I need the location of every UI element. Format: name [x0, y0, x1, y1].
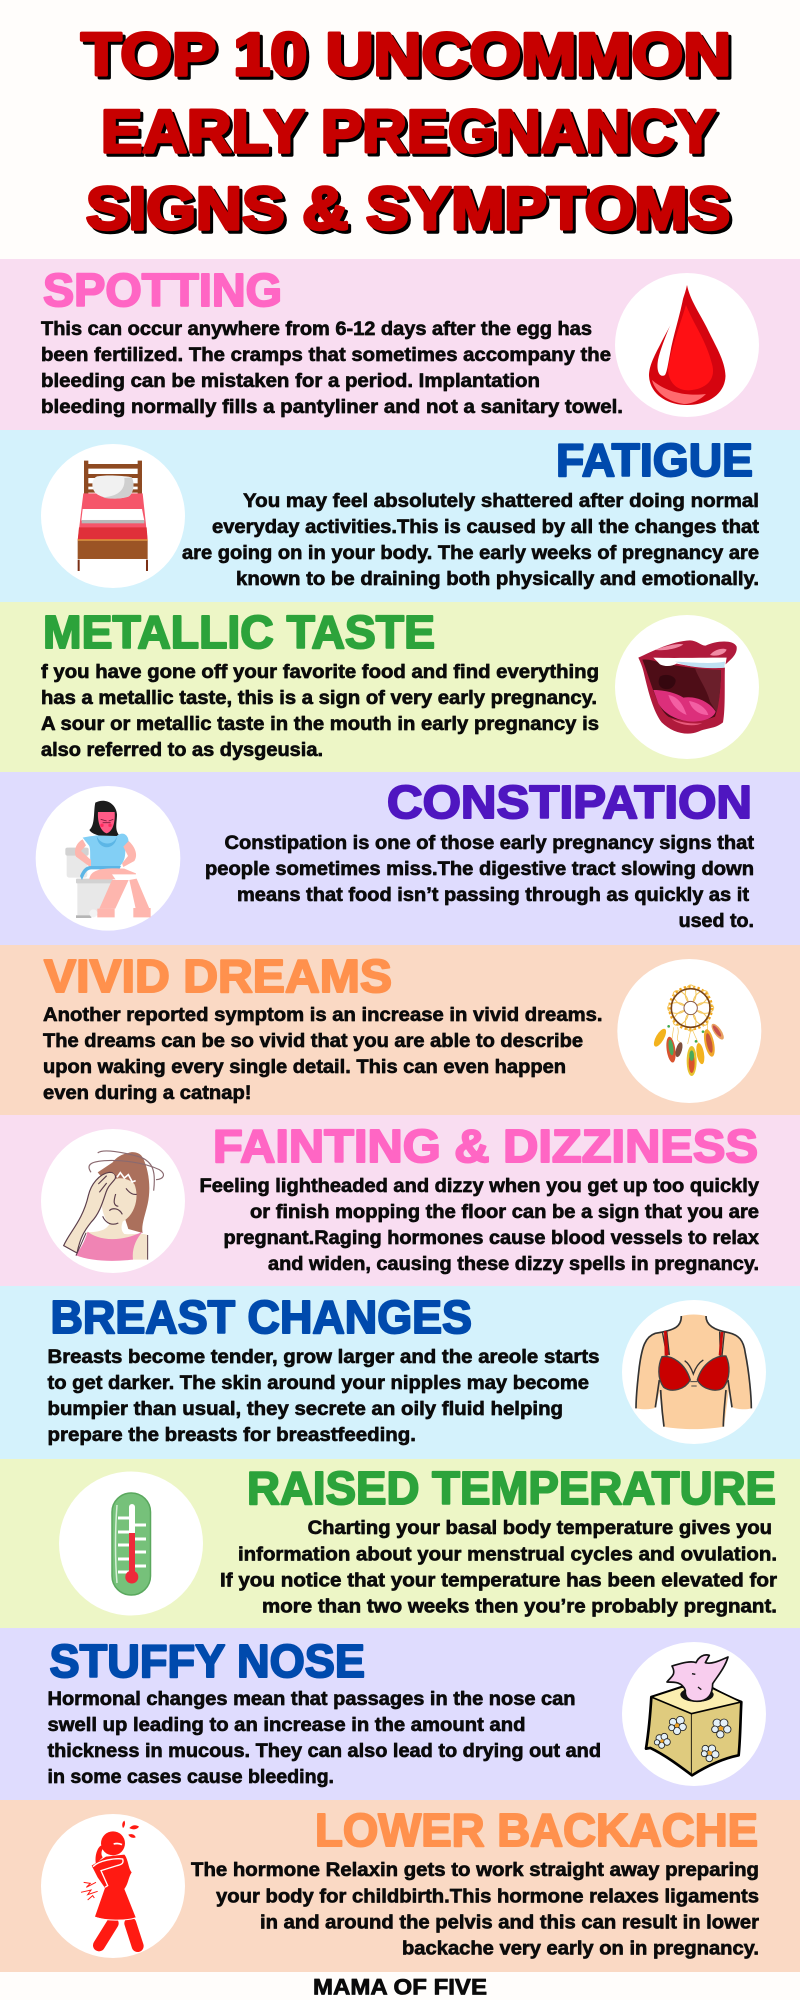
- panel: vivid dreams: [0, 945, 800, 1115]
- text block: breast changes: prepare the breasts for breastfeeding.: [48, 1425, 416, 1446]
- heading: breast changes: BREAST CHANGES: [50, 1291, 472, 1343]
- title: [81, 21, 731, 242]
- heading: fainting and dizziness: FAINTING & DIZZINESS: [213, 1120, 758, 1172]
- icon: open mouth: [615, 615, 759, 759]
- text block: fatigue: everyday activities.This is caused by all the changes that: [212, 517, 760, 538]
- text block: fainting and dizziness: Feeling lightheaded and dizzy when you get up too quickly: [200, 1176, 759, 1197]
- panel: metallic taste: [0, 602, 800, 772]
- text block: vivid dreams: [43, 1005, 602, 1104]
- heading: stuffy nose: STUFFY NOSE: [50, 1635, 365, 1687]
- text block: raised temperature: If you notice that your temperature has been elevated for: [220, 1570, 778, 1592]
- text block: breast changes: to get darker. The skin around your nipples may become: [48, 1373, 589, 1394]
- text block: fainting and dizziness: [200, 1176, 759, 1275]
- text block: constipation: [205, 833, 755, 932]
- text block: metallic taste: also referred to as dysgeusia.: [41, 740, 323, 761]
- icon: tissue box: [622, 1642, 766, 1786]
- text block: lower backache: [191, 1860, 760, 1960]
- text block: vivid dreams: The dreams can be so vivid that you are able to describe: [43, 1031, 583, 1052]
- icon: bed: [41, 444, 185, 588]
- panel: raised temperature: [0, 1459, 800, 1628]
- text block: fatigue: You may feel absolutely shattered after doing normal: [243, 491, 759, 512]
- panel: constipation: [0, 772, 800, 945]
- panel: breast changes: [0, 1286, 800, 1459]
- panel: stuffy nose: [0, 1628, 800, 1800]
- heading: fatigue: FATIGUE: [556, 434, 753, 486]
- text block: fatigue: [182, 491, 760, 590]
- text block: fainting and dizziness: and widen, causing these dizzy spells in pregnancy.: [268, 1254, 759, 1275]
- text block: spotting: This can occur anywhere from 6-12 days after the egg has: [41, 319, 592, 340]
- text block: constipation: used to.: [679, 911, 754, 932]
- text block: raised temperature: [220, 1518, 778, 1618]
- icon: torso with red bra: [622, 1300, 766, 1444]
- text block: vivid dreams: upon waking every single detail. This can even happen: [43, 1057, 566, 1078]
- text block: fatigue: known to be draining both physically and emotionally.: [236, 569, 759, 590]
- text block: spotting: [41, 319, 623, 418]
- text block: raised temperature: more than two weeks then you’re probably pregnant.: [262, 1596, 777, 1618]
- text block: vivid dreams: even during a catnap!: [43, 1083, 252, 1104]
- text block: stuffy nose: in some cases cause bleeding.: [48, 1767, 334, 1788]
- heading: metallic taste: METALLIC TASTE: [43, 606, 435, 658]
- text block: metallic taste: f you have gone off your favorite food and find everything: [41, 662, 599, 683]
- text block: metallic taste: A sour or metallic taste in the mouth in early pregnancy is: [41, 714, 599, 735]
- panel: fatigue: [0, 430, 800, 602]
- icon: woman on toilet: [36, 786, 180, 931]
- footer credit: MAMA OF FIVE: [313, 1974, 487, 2000]
- text block: constipation: Constipation is one of those early pregnancy signs that: [224, 833, 755, 854]
- text block: constipation: people sometimes miss.The digestive tract slowing down: [205, 859, 754, 880]
- heading: vivid dreams: VIVID DREAMS: [44, 950, 392, 1002]
- text block: constipation: means that food isn’t passing through as quickly as it: [237, 885, 750, 906]
- title: SIGNS & SYMPTOMS: [86, 175, 730, 242]
- icon: blood drop: [615, 273, 759, 417]
- icon: dizzy woman: [41, 1129, 185, 1273]
- text block: fainting and dizziness: pregnant.Raging hormones cause blood vessels to relax: [224, 1228, 759, 1249]
- text block: raised temperature: information about your menstrual cycles and ovulation.: [238, 1544, 777, 1566]
- heading: constipation: CONSTIPATION: [387, 776, 752, 828]
- text block: vivid dreams: Another reported symptom is an increase in vivid dreams.: [43, 1005, 602, 1026]
- text block: breast changes: [48, 1347, 600, 1446]
- text block: breast changes: bumpier than usual, they secrete an oily fluid helping: [48, 1399, 563, 1420]
- heading: raised temperature: RAISED TEMPERATURE: [247, 1462, 776, 1514]
- icon: dreamcatcher: [617, 959, 761, 1103]
- title: TOP 10 UNCOMMON: [81, 21, 731, 88]
- heading: spotting: SPOTTING: [43, 264, 282, 316]
- text block: lower backache: in and around the pelvis and this can result in lower: [260, 1912, 760, 1934]
- text block: fainting and dizziness: or finish mopping the floor can be a sign that you are: [250, 1202, 759, 1223]
- title: EARLY PREGNANCY: [101, 98, 716, 165]
- text block: metallic taste: has a metallic taste, this is a sign of very early pregnancy.: [41, 688, 597, 709]
- panel: lower backache: [0, 1800, 800, 1972]
- text block: stuffy nose: Hormonal changes mean that passages in the nose can: [48, 1689, 576, 1710]
- heading: lower backache: LOWER BACKACHE: [315, 1804, 758, 1856]
- text block: spotting: bleeding normally fills a pantyliner and not a sanitary towel.: [41, 397, 623, 418]
- text block: spotting: bleeding can be mistaken for a period. Implantation: [41, 371, 540, 392]
- text block: stuffy nose: thickness in mucous. They can also lead to drying out and: [48, 1741, 601, 1762]
- icon: woman with backache: [41, 1814, 185, 1958]
- panel: spotting: [0, 259, 800, 430]
- text block: breast changes: Breasts become tender, grow larger and the areole starts: [48, 1347, 600, 1368]
- text block: lower backache: The hormone Relaxin gets to work straight away preparing: [191, 1860, 759, 1881]
- text block: lower backache: your body for childbirth.This hormone relaxes ligaments: [216, 1886, 759, 1908]
- dizzy woman hair back: [98, 1153, 149, 1233]
- panel: fainting and dizziness: [0, 1115, 800, 1286]
- text block: stuffy nose: swell up leading to an increase in the amount and: [48, 1715, 526, 1736]
- text block: raised temperature: Charting your basal body temperature gives you: [308, 1518, 772, 1539]
- text block: lower backache: backache very early on in pregnancy.: [402, 1938, 759, 1960]
- text block: stuffy nose: [48, 1689, 601, 1788]
- text block: spotting: been fertilized. The cramps that sometimes accompany the: [41, 345, 611, 366]
- icon: thermometer: [59, 1472, 203, 1616]
- text block: fatigue: are going on in your body. The early weeks of pregnancy are: [182, 543, 759, 564]
- text block: metallic taste: [41, 662, 599, 761]
